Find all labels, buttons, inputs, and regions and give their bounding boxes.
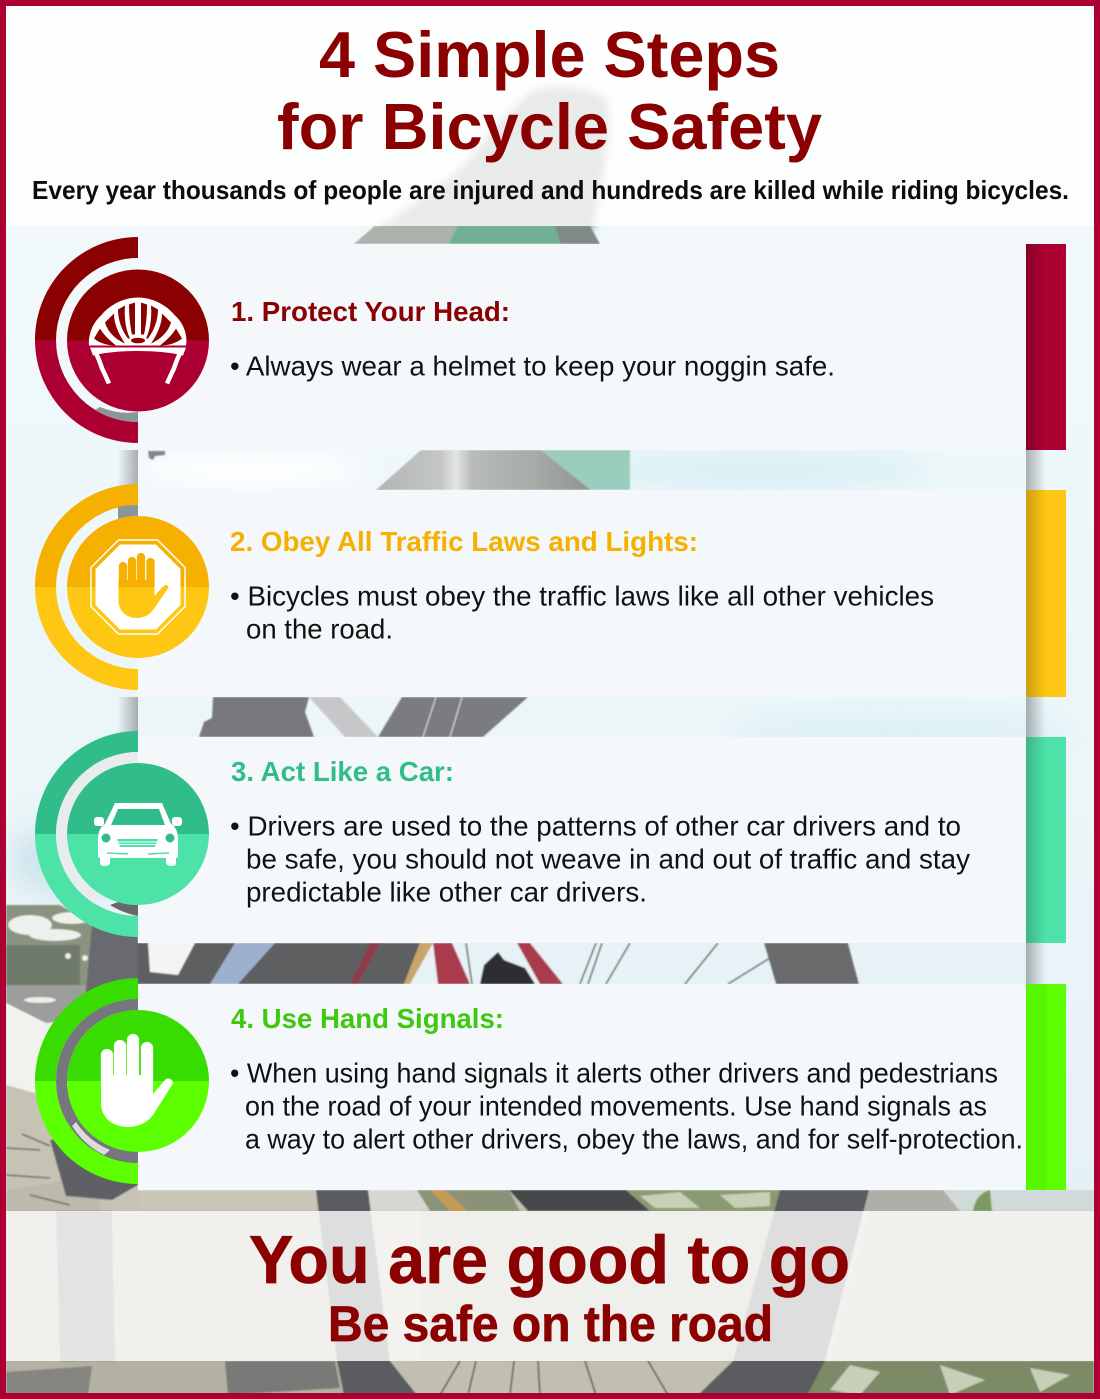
- card: [138, 490, 1026, 697]
- panel: step 4 use hand signals: [35, 978, 1066, 1190]
- body text: on the road of your intended movements. Use hand signals as: [245, 1090, 987, 1122]
- color bar: [1026, 984, 1066, 1190]
- bike frame, upper gap: [199, 697, 314, 737]
- foliage blossoms: [8, 912, 92, 1003]
- color bar: [1026, 244, 1066, 450]
- left side foliage and road: [6, 905, 138, 1005]
- title: for Bicycle Safety: [277, 91, 822, 163]
- body text: [230, 1058, 1023, 1154]
- color bar: [1026, 490, 1066, 697]
- ring: [35, 731, 138, 937]
- right and left column shadows: [117, 450, 138, 490]
- panel: header background: [6, 6, 1094, 226]
- body text: • Always wear a helmet to keep your noggin safe.: [230, 350, 835, 382]
- color bar: [1026, 737, 1066, 943]
- heading: 4. Use Hand Signals:: [231, 1003, 504, 1034]
- card: [138, 737, 1026, 943]
- body text: on the road.: [246, 614, 393, 644]
- ring: [35, 237, 138, 443]
- subtitle: Every year thousands of people are injured and hundreds are killed while riding bicycles.: [32, 175, 1069, 205]
- body text: • When using hand signals it alerts other drivers and pedestrians: [230, 1058, 998, 1088]
- rider head: [375, 87, 610, 230]
- title: [277, 19, 822, 163]
- lower wheels and ground: [138, 1190, 1094, 1395]
- ring: [35, 978, 138, 1184]
- body text: a way to alert other drivers, obey the laws, and for self-protection.: [245, 1124, 1023, 1154]
- card: [138, 984, 1026, 1190]
- icon: helmet: [67, 270, 209, 412]
- body text: predictable like other car drivers.: [246, 876, 647, 908]
- body text: [230, 810, 970, 908]
- panel: footer band background: [6, 1211, 1094, 1361]
- body text: be safe, you should not weave in and out of traffic and stay: [246, 844, 970, 874]
- card: [138, 244, 1026, 450]
- icon: car: [67, 763, 209, 905]
- panel: step 2 obey traffic laws: [35, 484, 1066, 697]
- body text: • Bicycles must obey the traffic laws like all other vehicles: [230, 580, 934, 612]
- icon: stop sign with hand: [67, 516, 209, 658]
- closing message: You are good to go: [249, 1222, 850, 1298]
- rider torso: [354, 226, 600, 244]
- body text: • Drivers are used to the patterns of other car drivers and to: [230, 810, 961, 842]
- closing message: [249, 1222, 850, 1352]
- panel: step 1 protect your head: [35, 237, 1066, 450]
- body text: [230, 580, 934, 644]
- middle frame gap: [138, 943, 1026, 984]
- closing message: Be safe on the road: [328, 1296, 773, 1352]
- icon: hand: [67, 1010, 209, 1152]
- heading: 1. Protect Your Head:: [231, 296, 510, 327]
- title: 4 Simple Steps: [319, 19, 780, 91]
- heading: 2. Obey All Traffic Laws and Lights:: [230, 526, 698, 557]
- heading: 3. Act Like a Car:: [231, 756, 454, 787]
- ring: [35, 484, 138, 690]
- panel: step 3 act like a car: [35, 731, 1066, 943]
